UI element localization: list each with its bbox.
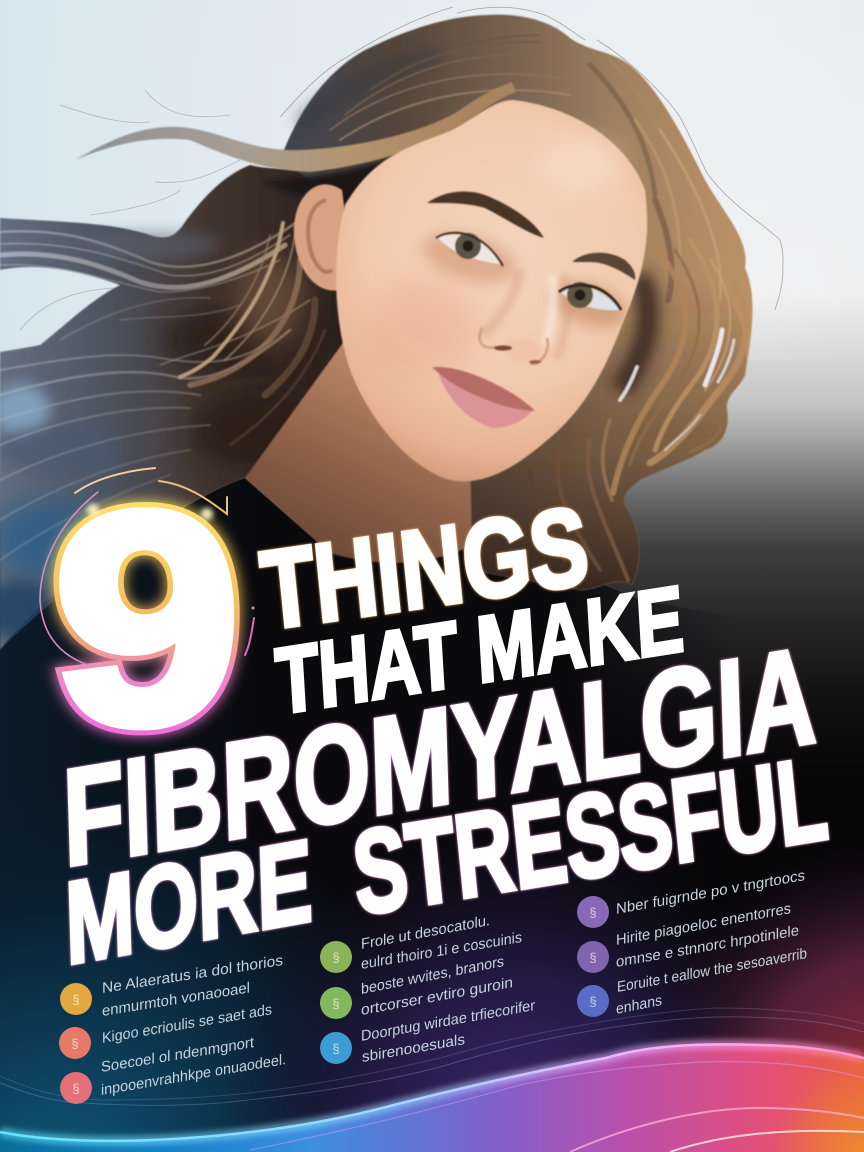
number 9 [40,452,254,786]
list text 2: eulrd thoiro 1i e coscuinis [361,929,522,973]
icon: violet bullet [577,896,609,928]
neck [245,340,472,563]
lips [432,367,535,428]
list text 3: omnse e stnnorc hrpotinlele [616,922,799,971]
icon: violet bullet two: § [589,950,597,965]
icon: indigo bullet [577,985,609,1017]
list text 3: Eoruite t eallow the sesoaverrib [617,945,807,996]
icon: blue bullet [320,1032,352,1064]
list text 2: Frole ut desocatolu. [361,912,490,953]
MORE: MORE [64,815,314,989]
list text 2: ortcorser evtiro guroin [361,974,513,1019]
icon: rose bullet: § [72,1081,80,1096]
icon: green bullet two [320,987,352,1019]
nose [480,328,548,364]
strands [0,220,310,560]
lower glow background [0,700,864,1152]
orbit arcs [40,468,254,665]
list text 2: beoste wvites, branors [361,953,504,998]
main hair [75,7,783,590]
list column 2 [320,912,535,1066]
list text 3: Hirite piagoeloc enentorres [616,900,791,949]
list text 1: Soecoel ol ndenmgnort [101,1034,255,1076]
list text 1: Kigoo ecrioulis se saet ads [102,1001,272,1047]
list text 1 [101,952,286,1099]
list text 1: inpooenvrahhkpe onuaodeel. [101,1051,286,1099]
THAT MAKE: THAT MAKE [273,566,686,734]
list text 2: sbirenooesuals [362,1031,465,1066]
golden curls [530,240,746,580]
list text 3 [616,867,807,1018]
flyaway hair [280,7,783,310]
list text 3: Nber fuigrnde po v tngrtoocs [616,867,805,918]
icon: violet bullet: § [589,905,597,920]
icon: amber bullet [60,983,92,1015]
list column 3 [577,867,807,1018]
coloured outline: 9 [54,452,240,786]
tan streaks [180,223,325,445]
icon: indigo bullet: § [589,994,597,1009]
title [61,484,833,989]
right eye [559,282,621,310]
upper wisp joining parting band [75,82,516,172]
icon: green bullet: § [332,950,340,965]
colour patches in hair [0,231,330,640]
icon: green bullet [320,941,352,973]
list text 2: Doorptug wirdae trfiecorifer [361,997,535,1045]
face [336,100,647,481]
ear [294,184,350,291]
icon: blue bullet: § [332,1041,340,1056]
sky gaps through curls [620,330,734,450]
list text 3: enhans [616,992,662,1018]
list text 2 [361,912,535,1066]
glow: 9 [54,452,240,786]
dark hair beside temple [262,135,445,240]
flyaway hairs [20,90,240,330]
icon: green bullet two: § [332,996,340,1011]
icon: amber bullet: § [72,992,80,1007]
shirt [0,478,864,1152]
white numeral: 9 [54,452,240,786]
right eyebrow [572,253,635,280]
icon: rose bullet [60,1072,92,1104]
wave band [0,1008,864,1152]
icon: coral bullet: § [71,1036,79,1051]
crown strands [330,35,721,300]
flowing hair left [0,90,350,650]
left eye [436,233,503,266]
list text 1: enmurmtoh vonaooael [102,979,250,1020]
list column 1 [59,952,286,1104]
THINGS: THINGS [256,484,593,653]
icon: violet bullet two [577,941,609,973]
icon: coral bullet [59,1027,91,1059]
left eyebrow [427,191,544,238]
sparkles [87,504,213,520]
list text 1: Ne Alaeratus ia dol thorios [102,952,283,997]
